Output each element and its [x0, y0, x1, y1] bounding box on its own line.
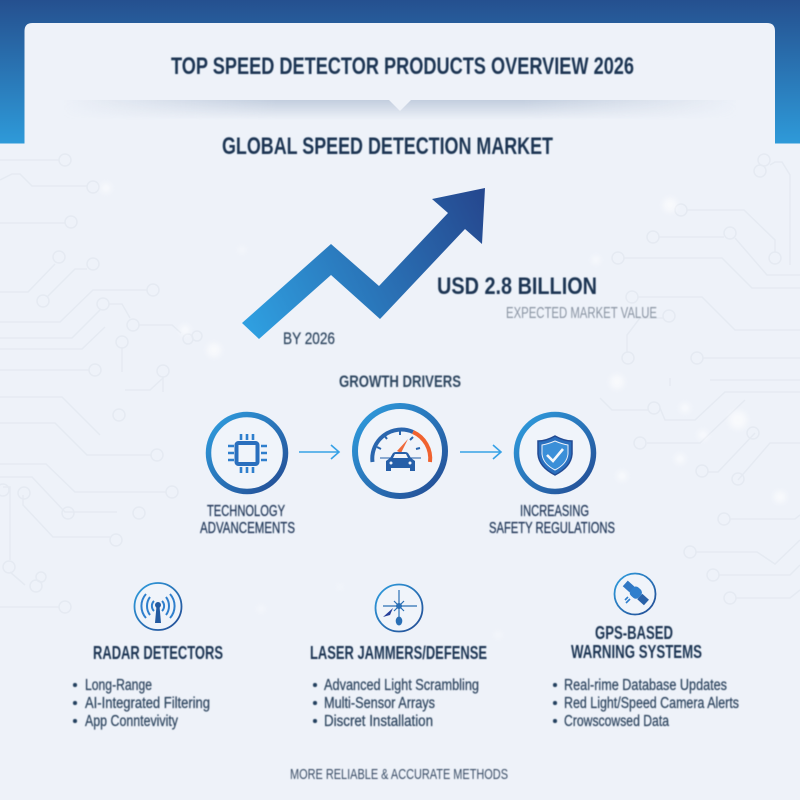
icon: satellite: [614, 574, 656, 614]
growth arrow: [242, 188, 485, 339]
list: laser features: Advanced Light Scrambling: [324, 677, 479, 694]
label: increasing safety regulations: SAFETY REGULATIONS: [489, 520, 615, 537]
heading: gps warning systems: [571, 623, 702, 662]
label: technology advancements: ADVANCEMENTS: [200, 520, 295, 537]
growth drivers heading: GROWTH DRIVERS: [339, 372, 461, 391]
label: technology advancements: [200, 503, 295, 537]
heading: gps warning systems: WARNING SYSTEMS: [571, 642, 702, 662]
heading: laser jammers: LASER JAMMERS/DEFENSE: [310, 643, 487, 663]
icon: technology chip: [208, 414, 286, 492]
section heading: market: GLOBAL SPEED DETECTION MARKET: [222, 133, 553, 160]
panel: radar detectors: [73, 583, 223, 730]
label: increasing safety regulations: [489, 503, 615, 537]
icon: speedometer and car: [355, 406, 445, 496]
header card: [24, 23, 775, 144]
icon: radar antenna: [134, 583, 182, 630]
title: TOP SPEED DETECTOR PRODUCTS OVERVIEW 2026: [171, 53, 634, 80]
market value: [437, 273, 657, 322]
list: laser features: Discret Installation: [324, 713, 433, 730]
background circuit pattern: [0, 154, 800, 613]
list: laser features: [313, 677, 479, 730]
arrow: gauge to shield: [460, 445, 501, 459]
list: gps features: Crowscowsed Data: [564, 713, 669, 730]
arrow: technology to gauge: [299, 445, 339, 459]
market value: USD 2.8 BILLION: [437, 273, 597, 300]
heading: gps warning systems: GPS-BASED: [595, 623, 673, 643]
market value: EXPECTED MARKET VALUE: [506, 305, 657, 322]
list: radar features: App Conntevivity: [85, 713, 178, 730]
by 2026 label: BY 2026: [283, 329, 335, 348]
list: radar features: [73, 677, 210, 730]
label: increasing safety regulations: INCREASING: [520, 503, 589, 520]
label: technology advancements: TECHNOLOGY: [207, 503, 285, 520]
list: radar features: Long-Range: [85, 677, 152, 694]
panel: laser jammers: [310, 584, 487, 730]
background glow spots: [101, 183, 786, 638]
footer note: MORE RELIABLE & ACCURATE METHODS: [290, 766, 508, 783]
icon: laser burst: [376, 584, 422, 632]
icon: safety shield: [516, 414, 594, 492]
list: gps features: Real-rime Database Updates: [564, 677, 727, 694]
list: radar features: AI-Integrated Filtering: [85, 695, 210, 712]
heading: radar detectors: RADAR DETECTORS: [93, 643, 223, 663]
header band: [0, 0, 800, 144]
list: laser features: Multi-Sensor Arrays: [324, 695, 435, 712]
panel: gps warning systems: [553, 574, 739, 730]
list: gps features: Red Light/Speed Camera Alerts: [564, 695, 739, 712]
title shadow divider with notch: [98, 100, 704, 116]
list: gps features: [553, 677, 739, 730]
